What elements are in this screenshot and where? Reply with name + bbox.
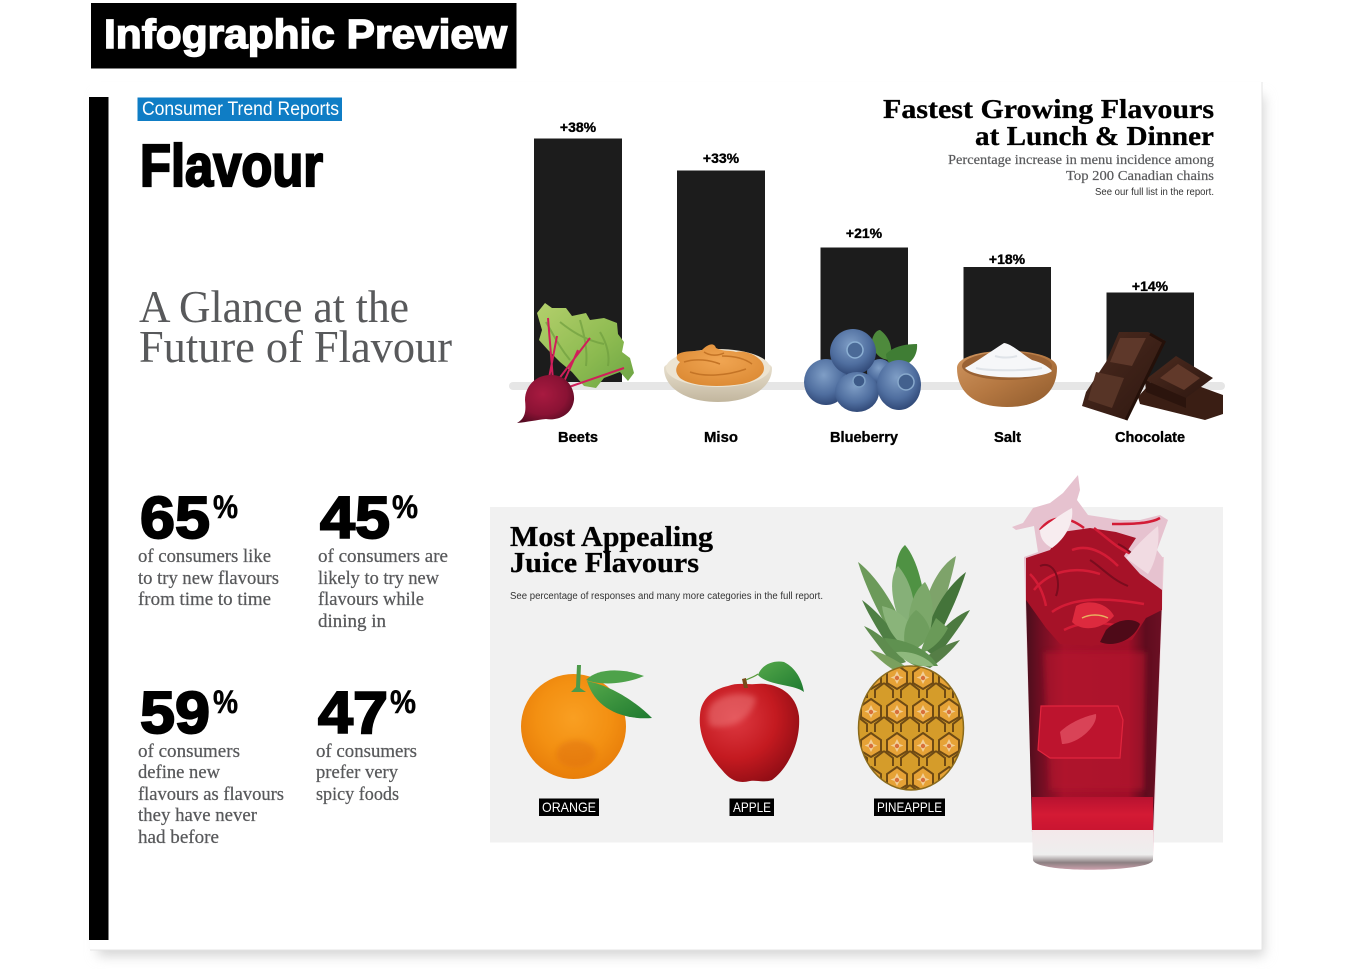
category labels bbox=[558, 429, 1185, 446]
stat: 59%: flavours as flavours bbox=[138, 784, 284, 805]
stat: 59%: they have never bbox=[138, 805, 258, 826]
bar chart: fastest growing flavours bbox=[509, 94, 1225, 446]
report tag: Consumer Trend Reports bbox=[142, 99, 339, 120]
category labels: Blueberry bbox=[830, 429, 899, 446]
panel: juice flavours bbox=[490, 507, 1223, 842]
panel heading: See percentage of responses and many more categories in the full report. bbox=[510, 591, 823, 602]
fruit labels: PINEAPPLE bbox=[877, 799, 942, 815]
chart heading: Top 200 Canadian chains bbox=[1066, 169, 1214, 184]
stat: 59%: had before bbox=[138, 827, 219, 848]
icon: apple bbox=[700, 662, 804, 782]
stat: 65%: % bbox=[213, 489, 238, 525]
stat: 45% bbox=[318, 485, 448, 632]
chart heading: See our full list in the report. bbox=[1095, 187, 1214, 198]
chart heading: Percentage increase in menu incidence among bbox=[948, 153, 1214, 168]
icon: pineapple bbox=[858, 545, 970, 790]
stat: 45%: of consumers are bbox=[318, 546, 448, 567]
fruit labels: ORANGE bbox=[542, 799, 596, 815]
ice cube bbox=[1038, 706, 1123, 758]
icon: salt bowl bbox=[957, 343, 1057, 407]
bar values: +18% bbox=[989, 251, 1026, 267]
bar values: +38% bbox=[560, 119, 597, 135]
category labels: Beets bbox=[558, 429, 598, 446]
fruit labels bbox=[539, 798, 945, 816]
icon: chocolate bbox=[1082, 332, 1223, 420]
stat: 45%: flavours while bbox=[318, 589, 424, 610]
left black bar bbox=[89, 97, 108, 940]
bar values: +21% bbox=[846, 225, 883, 241]
stat: 65%: from time to time bbox=[138, 589, 271, 610]
stat: 45%: 45 bbox=[320, 485, 390, 551]
bars bbox=[534, 138, 1194, 384]
chart heading bbox=[883, 94, 1214, 198]
panel heading: Most Appealing bbox=[510, 522, 713, 553]
splash bbox=[1012, 475, 1168, 646]
panel heading: Juice Flavours bbox=[510, 548, 699, 579]
chart heading: at Lunch & Dinner bbox=[975, 121, 1214, 151]
category labels: Salt bbox=[994, 429, 1021, 446]
bar values: +33% bbox=[703, 150, 740, 166]
stat: 65%: 65 bbox=[140, 485, 210, 551]
stat: 47%: prefer very bbox=[316, 762, 398, 783]
stat: 47%: of consumers bbox=[316, 741, 417, 762]
stat: 47% bbox=[316, 680, 417, 805]
stat: 47%: spicy foods bbox=[316, 784, 399, 805]
stat: 59% bbox=[138, 680, 284, 848]
stat: 59%: % bbox=[213, 684, 238, 720]
stat: 65%: of consumers like bbox=[138, 546, 271, 567]
stat: 45%: likely to try new bbox=[318, 568, 439, 589]
category labels: Chocolate bbox=[1115, 429, 1185, 446]
bar values: +14% bbox=[1132, 278, 1169, 294]
stat: 59%: of consumers bbox=[138, 741, 240, 762]
preview banner: Infographic Preview bbox=[104, 11, 507, 57]
bar values bbox=[560, 119, 1169, 294]
stat: 59%: 59 bbox=[140, 680, 210, 746]
category labels: Miso bbox=[704, 429, 738, 446]
stat: 45%: dining in bbox=[318, 611, 386, 632]
subtitle bbox=[139, 282, 452, 372]
stat: 65%: to try new flavours bbox=[138, 568, 279, 589]
stat: 59%: define new bbox=[138, 762, 220, 783]
icon: blueberries bbox=[804, 329, 921, 412]
stat: 47%: % bbox=[390, 684, 416, 720]
stat: 45%: % bbox=[392, 489, 418, 525]
stat: 47%: 47 bbox=[318, 680, 388, 746]
subtitle: Future of Flavour bbox=[139, 322, 452, 372]
subtitle: A Glance at the bbox=[139, 282, 409, 332]
icon: miso bowl bbox=[664, 344, 772, 402]
stat: 65% bbox=[138, 485, 279, 610]
page card shadow bbox=[90, 82, 1264, 956]
fruit labels: APPLE bbox=[733, 799, 771, 815]
preview banner bbox=[91, 3, 516, 68]
icon: juice glass with splash bbox=[1012, 475, 1168, 870]
chart baseline bbox=[509, 382, 1225, 390]
panel heading bbox=[510, 522, 823, 602]
icon: orange bbox=[521, 665, 652, 779]
chart heading: Fastest Growing Flavours bbox=[883, 94, 1214, 124]
title: Flavour: Flavour bbox=[140, 133, 323, 199]
icon: beet bbox=[517, 303, 634, 423]
